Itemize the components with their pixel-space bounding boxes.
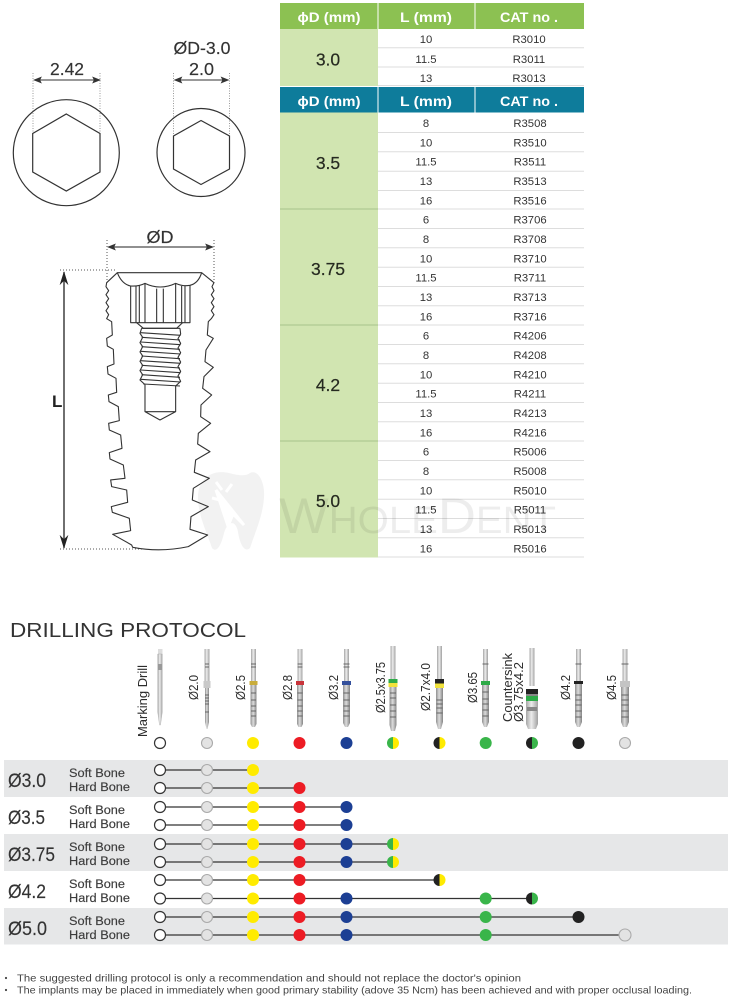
diagram: 2.42 hex connection: [13, 59, 119, 206]
protocol row: diameter 5.0: Ø5.0: [8, 919, 47, 940]
drill: 2.8: [281, 649, 306, 749]
dimension label: diameter minus 3.0: ØD-3.0: [174, 38, 231, 58]
rows: 3.5 lengths and catalog numbers: 13: [420, 176, 432, 188]
watermark: tooth logo: [198, 472, 264, 550]
rows: 3.0 lengths and catalog numbers: 13: [420, 73, 432, 85]
rows: 5.0 lengths and catalog numbers: 6: [423, 447, 429, 459]
rows: 3.75 lengths and catalog numbers: R3706: [513, 215, 547, 227]
drill: 2.5x3.75: [374, 646, 399, 749]
protocol row: diameter 5.0: [4, 908, 728, 944]
footnotes: [5, 974, 692, 996]
protocol row: diameter 3.0: Ø3.0: [8, 771, 46, 792]
rows: 3.75 lengths and catalog numbers: R3711: [514, 273, 546, 285]
drill: 4.2: Ø4.2: [559, 675, 573, 700]
cell: diameter 5.0: [280, 441, 378, 558]
dimension label: length L: L: [52, 392, 62, 411]
rows: 3.5 lengths and catalog numbers: R3510: [513, 137, 547, 149]
drill legend: [136, 646, 630, 749]
protocol row: diameter 3.0: Soft Bone: [69, 768, 125, 780]
drill: 3.2: Ø3.2: [327, 675, 341, 700]
rows: 3.75 lengths and catalog numbers: R3708: [513, 234, 547, 246]
rows: 4.2 lengths and catalog numbers: 8: [423, 350, 429, 362]
drill: 2.8: Ø2.8: [281, 675, 295, 700]
cell: diameter 3.0: 3.0: [316, 50, 340, 70]
rows: 4.2 lengths and catalog numbers: 11.5: [415, 389, 437, 401]
cell: diameter 3.5: [280, 112, 378, 209]
protocol row: diameter 3.5: Ø3.5: [8, 808, 45, 829]
drill: 4.5: Ø4.5: [605, 675, 619, 700]
rows: 4.2 lengths and catalog numbers: R4208: [513, 350, 547, 362]
rows: 3.5 lengths and catalog numbers: R3513: [513, 176, 547, 188]
drill: countersink 3.75x4.2: Countersink: [501, 652, 515, 722]
protocol row: diameter 3.5: [8, 801, 352, 831]
drill: 3.65: [466, 649, 492, 749]
drill: 3.65: Ø3.65: [466, 672, 480, 703]
rows: 3.0 lengths and catalog numbers: 10: [420, 34, 432, 46]
footnotes: The implants may be placed in immediately when good primary stability (adove 35 Ncm) has been achieved and with proper occlusal loading.: [17, 986, 692, 996]
rows: 3.0 lengths and catalog numbers: R3011: [513, 54, 545, 66]
cell: diameter 4.2: 4.2: [316, 375, 340, 395]
rows: 3.75 lengths and catalog numbers: R3716: [513, 311, 547, 323]
drill: marking drill: Marking Drill: [136, 665, 150, 737]
footnotes: The suggested drilling protocol is only a recommendation and should not replace the doctor's opinion: [17, 974, 521, 984]
drill: countersink 3.75x4.2: [501, 648, 538, 749]
rows: 4.2 lengths and catalog numbers: [415, 331, 547, 439]
protocol row: diameter 4.2: [8, 874, 538, 905]
rows: 5.0 lengths and catalog numbers: R5016: [513, 543, 547, 555]
rows: 3.0 lengths and catalog numbers: [378, 34, 584, 86]
cell: diameter 3.75: 3.75: [311, 259, 345, 279]
rows: 5.0 lengths and catalog numbers: R5011: [514, 505, 546, 517]
rows: 5.0 lengths and catalog numbers: 8: [423, 466, 429, 478]
protocol row: diameter 4.2: Soft Bone: [69, 879, 125, 891]
rows: 4.2 lengths and catalog numbers: R4213: [513, 408, 547, 420]
rows: 4.2 lengths and catalog numbers: R4211: [514, 389, 546, 401]
drill: 2.5x3.75: Ø2.5x3.75: [374, 662, 388, 713]
header: 3.0 table: [280, 3, 584, 29]
rows: 3.75 lengths and catalog numbers: 6: [423, 215, 429, 227]
drill: 2.5: [234, 649, 259, 749]
protocol row: diameter 3.5: Soft Bone: [69, 805, 125, 817]
rows: 3.75 lengths and catalog numbers: R3713: [513, 292, 547, 304]
cell: diameter 3.75: [280, 209, 378, 325]
rows: 3.5 lengths and catalog numbers: 16: [420, 195, 432, 207]
rows: 3.5 lengths and catalog numbers: R3516: [513, 195, 547, 207]
protocol row: diameter 5.0: Hard Bone: [69, 930, 130, 942]
drill: 4.5: [605, 649, 630, 748]
header: main table: ϕD (mm): [298, 94, 360, 109]
table: implant sizes and catalog numbers: [280, 3, 584, 558]
rows: 4.2 lengths and catalog numbers: 13: [420, 408, 432, 420]
rows: 3.5 lengths and catalog numbers: 11.5: [415, 157, 437, 169]
rows: 3.75 lengths and catalog numbers: 13: [420, 292, 432, 304]
rows: 3.0 lengths and catalog numbers: R3013: [512, 73, 546, 85]
rows: 3.0 lengths and catalog numbers: 11.5: [415, 54, 437, 66]
header: main table: CAT no .: [500, 94, 558, 109]
rows: 4.2 lengths and catalog numbers: 16: [420, 427, 432, 439]
heading: drilling protocol: DRILLING PROTOCOL: [10, 620, 246, 642]
drill: countersink 3.75x4.2: Ø3.75x4.2: [512, 662, 526, 722]
cell: diameter 5.0: 5.0: [316, 491, 340, 511]
rows: 4.2 lengths and catalog numbers: R4206: [513, 331, 547, 343]
rows: 5.0 lengths and catalog numbers: 13: [420, 524, 432, 536]
rows: 5.0 lengths and catalog numbers: R5010: [513, 485, 547, 497]
protocol row: diameter 3.0: Hard Bone: [69, 782, 130, 794]
rows: 3.5 lengths and catalog numbers: 10: [420, 137, 432, 149]
rows: 5.0 lengths and catalog numbers: 11.5: [415, 505, 437, 517]
cell: diameter 4.2: [280, 325, 378, 441]
dimension label: diameter D: ØD: [146, 227, 174, 247]
rows: 4.2 lengths and catalog numbers: R4216: [513, 427, 547, 439]
protocol row: diameter 3.75: Hard Bone: [69, 856, 130, 868]
rows: 3.5 lengths and catalog numbers: R3511: [514, 157, 546, 169]
header: main table: L (mm): [400, 94, 452, 109]
dimension label: 2.42: 2.42: [50, 59, 84, 79]
rows: 5.0 lengths and catalog numbers: R5006: [513, 447, 547, 459]
header: 3.0 table: L (mm): [400, 10, 452, 25]
diagram: 2.0 hex connection: [157, 38, 245, 196]
rows: 3.0 lengths and catalog numbers: R3010: [512, 34, 546, 46]
diagram: implant cross section: [52, 227, 214, 550]
protocol row: diameter 3.75: [4, 834, 728, 871]
rows: 3.5 lengths and catalog numbers: R3508: [513, 118, 547, 130]
protocol row: diameter 4.2: Ø4.2: [8, 882, 46, 903]
drill: 2.0: Ø2.0: [187, 675, 201, 700]
rows: 3.75 lengths and catalog numbers: 8: [423, 234, 429, 246]
rows: 3.75 lengths and catalog numbers: [415, 215, 547, 323]
drill: 4.2: [559, 649, 584, 749]
rows: 5.0 lengths and catalog numbers: R5013: [513, 524, 547, 536]
rows: 4.2 lengths and catalog numbers: 6: [423, 331, 429, 343]
cell: diameter 3.0: [280, 29, 378, 86]
cell: diameter 3.5: 3.5: [316, 153, 340, 173]
header: 3.0 table: ϕD (mm): [298, 10, 360, 25]
rows: 3.75 lengths and catalog numbers: 16: [420, 311, 432, 323]
rows: 3.75 lengths and catalog numbers: R3710: [513, 253, 547, 265]
rows: 5.0 lengths and catalog numbers: [415, 447, 547, 555]
rows: 4.2 lengths and catalog numbers: 10: [420, 369, 432, 381]
protocol row: diameter 4.2: Hard Bone: [69, 893, 130, 905]
rows: 3.5 lengths and catalog numbers: 8: [423, 118, 429, 130]
header: main table: [280, 87, 584, 112]
drill: 2.7x4.0: [419, 646, 446, 749]
protocol row: diameter 5.0: Soft Bone: [69, 916, 125, 928]
rows: 3.5 lengths and catalog numbers: [415, 118, 547, 207]
rows: 5.0 lengths and catalog numbers: 16: [420, 543, 432, 555]
rows: 5.0 lengths and catalog numbers: R5008: [513, 466, 547, 478]
drill: 2.5: Ø2.5: [234, 675, 248, 700]
drill: 2.7x4.0: Ø2.7x4.0: [419, 663, 433, 711]
dimension label: 2.0: 2.0: [189, 59, 214, 79]
protocol row: diameter 3.75: Ø3.75: [8, 845, 55, 866]
rows: 3.75 lengths and catalog numbers: 11.5: [415, 273, 437, 285]
protocol row: diameter 3.75: Soft Bone: [69, 842, 125, 854]
rows: 3.75 lengths and catalog numbers: 10: [420, 253, 432, 265]
protocol row: diameter 3.0: [4, 760, 728, 797]
rows: 5.0 lengths and catalog numbers: 10: [420, 485, 432, 497]
protocol row: diameter 3.5: Hard Bone: [69, 819, 130, 831]
watermark: brand wordmark: WHOLEDENT: [279, 488, 556, 544]
rows: 4.2 lengths and catalog numbers: R4210: [513, 369, 547, 381]
header: 3.0 table: CAT no .: [500, 10, 558, 25]
drill: 2.0: [187, 649, 212, 748]
drill: marking drill: [136, 649, 166, 748]
drill: 3.2: [327, 649, 352, 749]
